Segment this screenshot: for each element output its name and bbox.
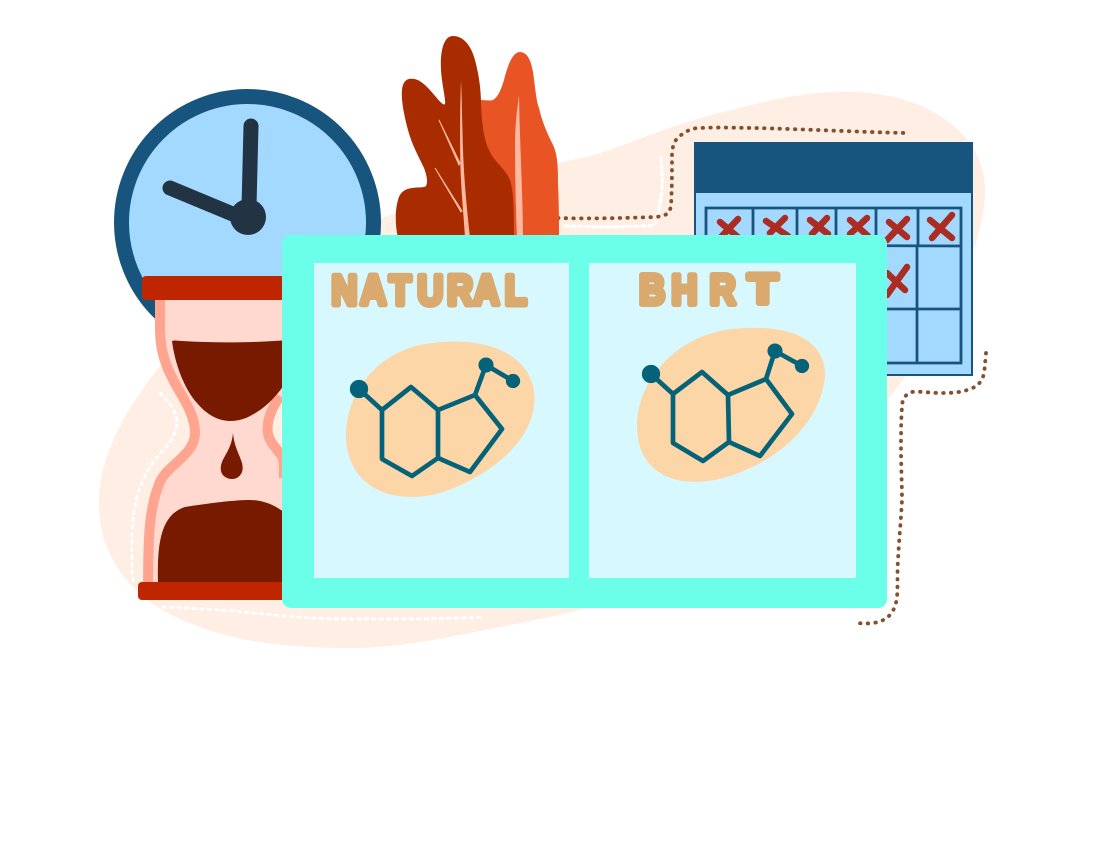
blob: natural molecule background: [346, 341, 535, 497]
background blob: [99, 92, 985, 648]
hourglass top bar: [142, 276, 292, 300]
dotted line: white top connector: [565, 155, 662, 227]
blob: bhrt molecule background: [637, 328, 825, 482]
icon: hourglass: [138, 276, 300, 600]
panel: comparison board: [282, 235, 887, 608]
hourglass bottom bar: [138, 582, 288, 600]
hourglass left outline: [148, 296, 195, 590]
panel: bhrt: [589, 263, 856, 578]
hourglass glass fill: [148, 296, 290, 590]
dotted line: white lower connectors: [132, 393, 483, 619]
hourglass right neck: [267, 392, 300, 480]
icon: bhrt molecule: [644, 346, 807, 461]
panel: natural: [314, 263, 569, 578]
top sand: [172, 340, 290, 421]
heading: bhrt: T: [748, 265, 778, 312]
dotted line: brown right connector: [853, 353, 986, 623]
icon: calendar: [694, 143, 973, 376]
icon: leaves: [396, 36, 559, 238]
bottom sand: [158, 500, 290, 584]
dotted line: brown top connector: [558, 128, 905, 218]
heading: bhrt: [639, 265, 778, 314]
heading: natural: NATURAL: [332, 268, 527, 314]
icon: clock: [122, 96, 374, 348]
heading: bhrt: BHR: [639, 267, 736, 314]
falling sand drop: [221, 433, 243, 479]
icon: natural molecule: [352, 360, 518, 476]
